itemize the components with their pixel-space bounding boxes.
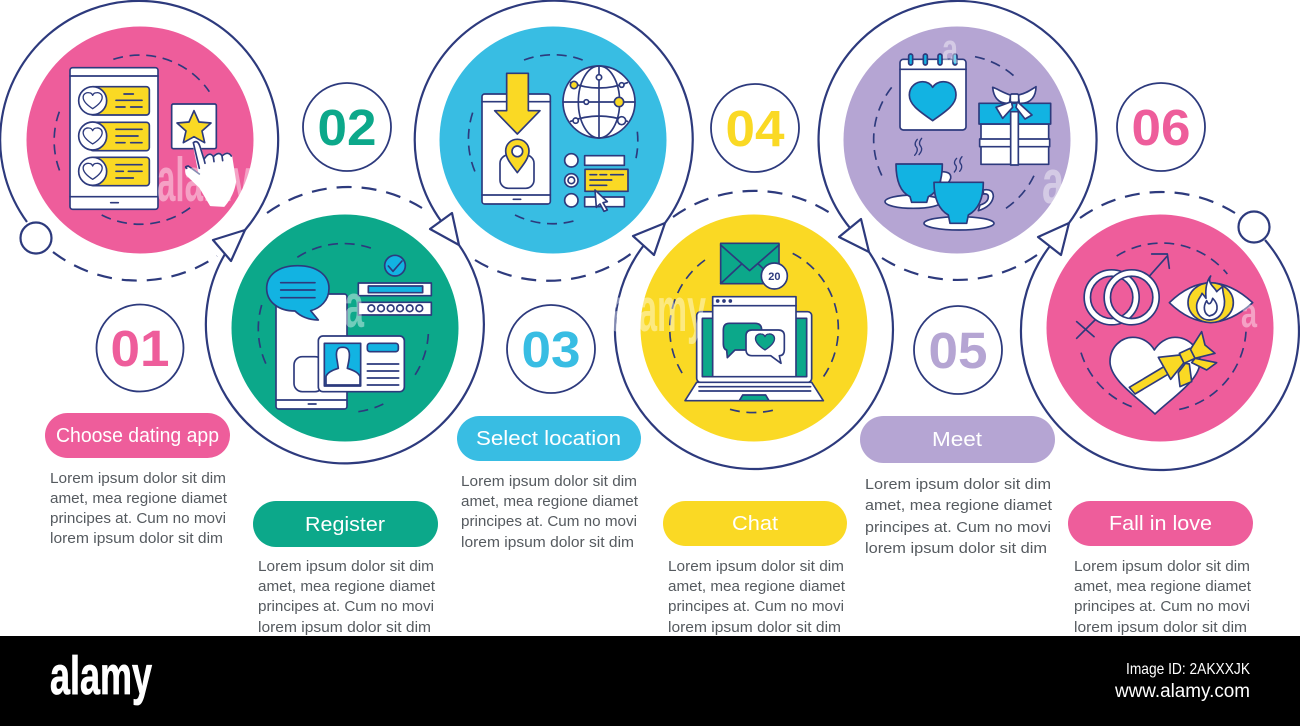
- watermarks: alamy: [157, 146, 251, 215]
- icon: calendar, gift and coffee cups: [874, 54, 1051, 230]
- ring: step 4 outline: [615, 245, 893, 469]
- footer image id: Image ID: 2AKXXJK: [1126, 661, 1250, 678]
- text block: step 1: amet, mea regione diamet: [50, 490, 228, 507]
- connector: dashed arc step 2: [267, 187, 422, 213]
- pill: Fall in love: [1068, 501, 1253, 546]
- text block: step 5: [865, 476, 1053, 557]
- disc: step 5: [844, 26, 1070, 254]
- number badge 05: [914, 306, 1002, 394]
- text block: step 5: principes at. Cum no movi: [865, 519, 1051, 536]
- icon: phone registration with profile card: [258, 244, 431, 412]
- disc: step 3: [440, 26, 666, 254]
- connector: dashed arc step 5: [882, 255, 1037, 280]
- text block: step 1: principes at. Cum no movi: [50, 510, 226, 527]
- arrow: step 4 to 5: [839, 219, 869, 252]
- icon: phone with dating app list and star: [54, 55, 235, 224]
- pill: Choose dating app: [45, 413, 230, 458]
- ring: step 5 outline: [819, 1, 1097, 228]
- disc: step 4: [640, 214, 868, 442]
- arrow: step 1 to 2: [213, 230, 245, 261]
- arrow: step 2 to 3: [430, 213, 459, 245]
- connector: dashed arc step 4: [673, 191, 830, 217]
- text block: step 3: lorem ipsum dolor sit dim: [461, 534, 634, 551]
- icon: laptop chat with envelope: [670, 243, 838, 413]
- text block: step 3: principes at. Cum no movi: [461, 513, 637, 530]
- text block: step 1: [50, 470, 228, 547]
- text block: step 4: amet, mea regione diamet: [668, 578, 846, 595]
- number badge 01: 01: [110, 320, 170, 377]
- icon: laptop chat with envelope: 20: [768, 271, 780, 283]
- ring: step 2 outline: [206, 245, 484, 463]
- text block: step 6: [1074, 558, 1252, 636]
- text block: step 1: Lorem ipsum dolor sit dim: [50, 470, 226, 487]
- watermarks: alamy: [610, 276, 706, 345]
- pill: Meet: Meet: [932, 429, 982, 451]
- number badge 05: 05: [928, 322, 988, 379]
- watermarks: a: [1042, 148, 1064, 217]
- footer bar with stock photo credit: [0, 636, 1300, 726]
- icon: location selection with globe: [468, 55, 638, 224]
- pill: Chat: [663, 501, 847, 546]
- number badge 02: [303, 83, 391, 171]
- text block: step 5: amet, mea regione diamet: [865, 497, 1053, 514]
- pill: Choose dating app: Choose dating app: [56, 425, 219, 447]
- text block: step 2: [258, 558, 436, 636]
- number badge 03: [507, 305, 595, 393]
- number badge 06: [1117, 83, 1205, 171]
- pill: Register: Register: [305, 514, 385, 536]
- text block: step 6: Lorem ipsum dolor sit dim: [1074, 558, 1250, 575]
- arrow: step 5 to 6: [1038, 223, 1069, 255]
- number badge 02: 02: [318, 99, 376, 156]
- panel: step 3 select location: [415, 1, 693, 551]
- text block: step 5: lorem ipsum dolor sit dim: [865, 540, 1047, 557]
- footer url: www.alamy.com: [1114, 681, 1250, 702]
- text block: step 6: principes at. Cum no movi: [1074, 598, 1250, 615]
- watermarks: [157, 25, 1257, 345]
- text block: step 2: principes at. Cum no movi: [258, 598, 434, 615]
- pill: Chat: Chat: [732, 513, 778, 535]
- connector: dashed arc step 3: [475, 253, 632, 281]
- text block: step 6: amet, mea regione diamet: [1074, 578, 1252, 595]
- text block: step 4: [668, 558, 846, 636]
- text block: step 2: amet, mea regione diamet: [258, 578, 436, 595]
- text block: step 1: lorem ipsum dolor sit dim: [50, 530, 223, 547]
- watermarks: a: [942, 25, 958, 72]
- ring: step 3 outline: [415, 1, 693, 223]
- text block: step 5: Lorem ipsum dolor sit dim: [865, 476, 1051, 493]
- disc: step 1: [26, 26, 254, 254]
- number badge 03: 03: [522, 321, 580, 378]
- text block: step 4: principes at. Cum no movi: [668, 598, 844, 615]
- watermarks: a: [344, 272, 364, 341]
- number badge 04: [711, 84, 799, 172]
- pill: Fall in love: Fall in love: [1109, 513, 1212, 535]
- pill: Register: [253, 501, 438, 547]
- number badge 04: 04: [726, 100, 785, 157]
- text block: step 2: lorem ipsum dolor sit dim: [258, 619, 431, 636]
- number badge 06: 06: [1132, 99, 1190, 156]
- panel: step 5 meet: [819, 1, 1097, 557]
- disc: step 6: [1046, 214, 1274, 442]
- pill: Select location: Select location: [476, 428, 621, 450]
- text block: step 6: lorem ipsum dolor sit dim: [1074, 619, 1247, 636]
- footer logo: alamy: [50, 646, 152, 706]
- pill: Meet: [860, 416, 1055, 463]
- panel: step 2 register: [206, 83, 484, 636]
- ring: step 1 outline: [0, 1, 278, 230]
- text block: step 3: amet, mea regione diamet: [461, 493, 639, 510]
- pill: Select location: [457, 416, 641, 461]
- end node: [1238, 212, 1270, 242]
- panel: step 6 fall in love: [1021, 83, 1299, 636]
- disc: step 2: [232, 214, 458, 442]
- arrow: step 3 to 4: [633, 223, 665, 255]
- text block: step 2: Lorem ipsum dolor sit dim: [258, 558, 434, 575]
- text block: step 3: [461, 473, 639, 551]
- text block: step 3: Lorem ipsum dolor sit dim: [461, 473, 637, 490]
- panel: step 1 choose dating app: [0, 1, 278, 547]
- start node: [20, 222, 52, 254]
- watermarks: a: [1241, 289, 1257, 336]
- text block: step 4: lorem ipsum dolor sit dim: [668, 619, 841, 636]
- icon: rings, burning eye and gift heart: [1077, 243, 1253, 414]
- ring: step 6 outline: [1021, 240, 1299, 470]
- connector: dashed arc step 6: [1080, 192, 1235, 218]
- panel: step 4 chat: [615, 84, 893, 636]
- number badge 01: [96, 304, 184, 392]
- connector: dashed arc step 1: [53, 252, 217, 281]
- text block: step 4: Lorem ipsum dolor sit dim: [668, 558, 844, 575]
